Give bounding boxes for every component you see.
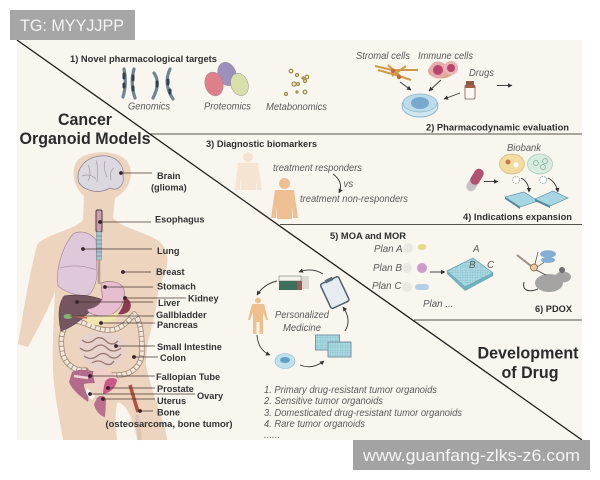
personalized medicine cycle [248,270,351,368]
section dividers [150,134,582,320]
list: tumor organoid types: 4. Rare tumor organoids [264,419,365,430]
organ labels: Uterus [157,396,186,406]
icon: liver [59,295,103,331]
icon: drug bottle [465,81,475,99]
section 5: MOA and MOR: 6) PDOX [535,304,573,315]
list: tumor organoid types: 2. Sensitive tumor organoids [263,396,383,407]
icon: drug plan shapes [402,243,429,292]
icon: lung [58,232,97,295]
organ labels: Brain [157,171,181,181]
watermark: bottom right [353,440,590,470]
icon: well plate: A [472,244,480,255]
list: tumor organoid types [263,385,462,441]
section 1: novel pharmacological targets: Metabonomics [266,102,327,113]
body silhouette [18,152,167,440]
icon: organoid dish [275,354,295,368]
organ labels: Fallopian Tube [156,372,220,382]
icon: darker human figure [271,178,298,219]
icon: capsule [471,174,479,186]
organ labels: Esophagus [155,214,205,224]
organ labels: Small Intestine [157,342,222,352]
list: tumor organoid types: 1. Primary drug-resistant tumor organoids [264,385,437,396]
icon: small intestine [78,332,126,368]
icon: petri dish [402,94,438,117]
list: tumor organoid types: ...... [264,430,280,441]
organ labels: Liver [158,298,180,308]
section 5: MOA and MOR: 5) MOA and MOR [330,231,406,242]
cycle arrows [257,270,348,367]
arrow: plans to well plate [430,271,445,273]
icon: fallopian tube and ovary [69,370,100,402]
organ labels: Colon [160,353,186,363]
organ labels: (osteosarcoma, bone tumor) [106,419,232,429]
icon: well plate [447,244,495,291]
icon: colon [61,314,142,375]
icon: chromosomes [123,69,173,99]
heading: development of drug: of Drug [502,364,558,382]
icon: biobank dishes [500,154,552,184]
section 2: pharmacodynamic evaluation [356,51,569,134]
icon: pale human figure [235,152,262,190]
organ labels: Bone [157,408,180,418]
section 5: MOA and MOR: Plan B [373,263,402,274]
heading: cancer organoid models: Cancer [58,111,113,129]
section 5: MOA and MOR: Plan C [372,281,402,292]
icon: culture plates [505,191,568,209]
heading: cancer organoid models [20,111,150,148]
personalized medicine cycle: Medicine [283,323,322,334]
section 2: pharmacodynamic evaluation: Stromal cells [356,51,410,62]
watermark: bottom right: www.guanfang-zlks-z6.com [362,446,580,465]
organ labels: Ovary [197,391,224,401]
icon: metabolites [284,69,309,96]
organ labels: Kidney [188,294,220,304]
icon: kidney [118,298,131,314]
section 3: diagnostic biomarkers: treatment non-responders [300,194,408,205]
icon: bone [130,385,140,440]
section 2: pharmacodynamic evaluation: Immune cells [418,51,473,62]
heading: development of drug: Development [478,344,579,362]
arrows to plates [521,178,558,192]
personalized medicine cycle: Personalized [275,310,330,321]
section 3: diagnostic biomarkers: 3) Diagnostic biomarkers [206,139,317,150]
icon: pancreas [84,312,118,325]
icon: small human figure [248,298,268,334]
arrow: capsule to biobank [484,180,498,182]
section 1: novel pharmacological targets: Genomics [128,102,170,112]
organ labels: Gallbladder [156,310,207,320]
organ labels: Prostate [157,384,194,394]
section 4: indications expansion: 4) Indications expansion [463,212,572,223]
section 4: indications expansion [463,143,572,223]
section 2: pharmacodynamic evaluation: 2) Pharmacodynamic evaluation [426,122,569,134]
section 5: MOA and MOR [330,231,573,315]
heading: cancer organoid models: Organoid Models [20,130,150,148]
section 1: novel pharmacological targets: 1) Novel pharmacological targets [70,54,217,65]
section 2: pharmacodynamic evaluation: Drugs [469,68,494,79]
icon: stomach [87,281,124,316]
icon: uterus [94,396,106,417]
watermark: top left: TG: MYYJJPP [20,16,124,35]
icon: well plate: B [469,260,476,271]
icon: drug box [279,276,309,290]
icon: organoid plates [316,335,351,357]
icon: brain [78,156,123,191]
icon: proteins [202,60,251,98]
organ labels: Stomach [157,282,196,292]
organ labels: Breast [156,267,185,277]
icon: PDOX mouse [517,250,571,292]
section 3: diagnostic biomarkers: treatment responders [273,163,362,174]
icon: gallbladder [64,314,87,319]
section 5: MOA and MOR: Plan A [374,244,403,255]
section 3: diagnostic biomarkers: vs [344,179,353,190]
section 4: indications expansion: Biobank [507,143,542,154]
heading: development of drug [478,344,579,382]
organ leader lines [70,171,195,413]
section 3: diagnostic biomarkers [206,139,408,219]
arrow: responders vs non-responders [333,174,341,193]
panel: background [17,40,582,440]
watermark: top left [10,10,135,40]
icon: prostate [93,369,118,394]
list: tumor organoid types: 3. Domesticated drug-resistant tumor organoids [264,408,462,419]
organ labels: Pancreas [157,320,198,330]
icon: clipboard [319,274,350,309]
organ labels [106,171,232,429]
icon: well plate: C [487,260,495,271]
organ labels: Lung [157,246,179,256]
icon: stromal cells [375,65,418,80]
section 5: MOA and MOR: Plan ... [423,299,454,310]
icon: immune cells [428,61,458,78]
section 1: novel pharmacological targets [70,54,327,113]
diagonal divider [17,40,582,440]
organ labels: (glioma) [151,182,187,192]
section 1: novel pharmacological targets: Proteomics [204,102,251,112]
arrows into dish [400,80,512,99]
icon: esophagus [96,210,102,284]
